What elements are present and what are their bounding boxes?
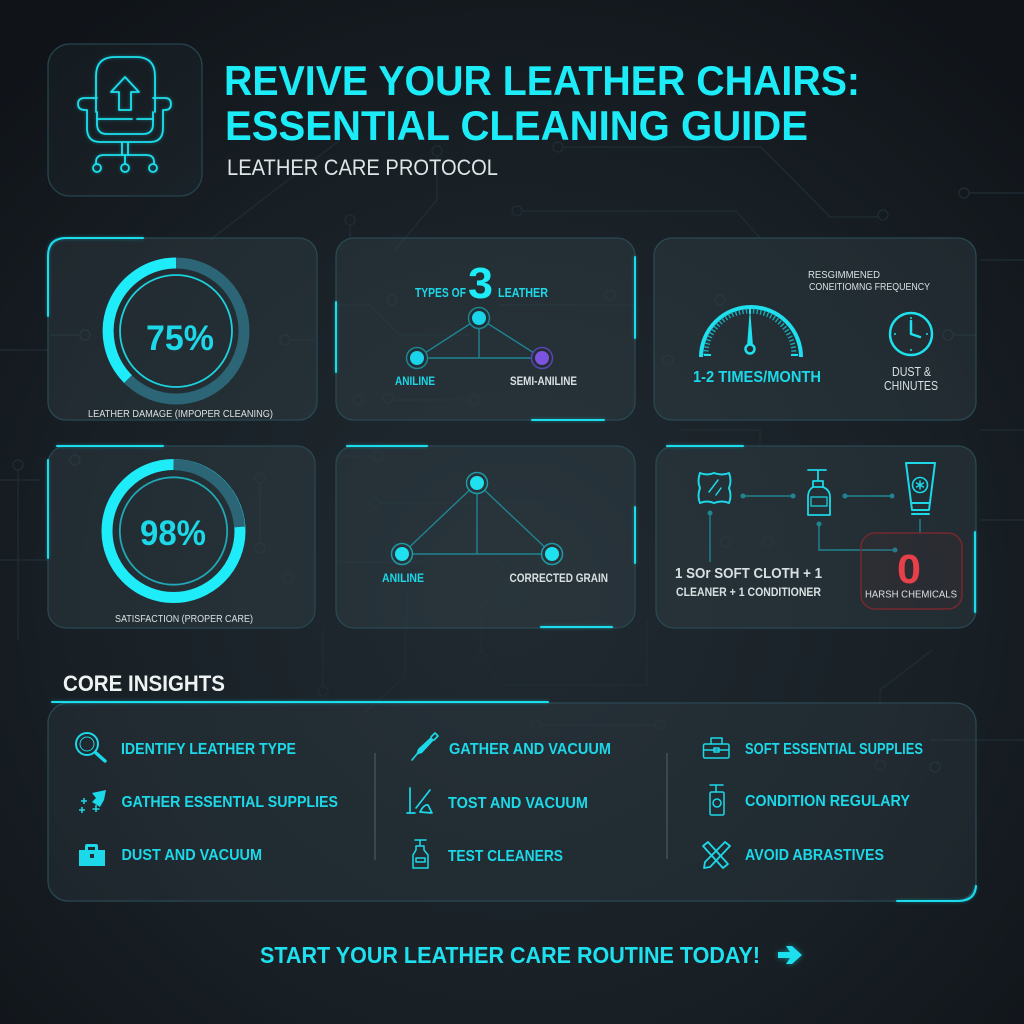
heading — [808, 270, 930, 293]
panel: types of leather — [336, 238, 635, 420]
panel: supplies — [656, 446, 976, 628]
panel: core insights — [48, 702, 976, 901]
callout: zero harsh chemicals — [861, 533, 962, 609]
insight: test cleaners: TEST CLEANERS — [448, 848, 563, 865]
insight: dust and vacuum — [79, 844, 262, 866]
heading: RESGIMMENED — [808, 270, 880, 281]
panel: conditioning frequency — [654, 238, 976, 420]
heading: types of 3 leather: LEATHER — [498, 285, 548, 300]
label: aniline: ANILINE — [395, 374, 435, 388]
panel: aniline and corrected grain — [336, 446, 635, 628]
label: corrected grain: CORRECTED GRAIN — [510, 571, 608, 585]
insight: test cleaners — [413, 840, 563, 868]
clock caption: DUST & — [892, 365, 932, 379]
supplies text: 1 SOr SOFT CLOTH + 1 — [675, 566, 822, 582]
heading: types of 3 leather: 3 — [468, 259, 493, 308]
insight: condition regulary — [710, 785, 910, 815]
insight: avoid abrasives — [703, 842, 884, 868]
insight: gather and vacuum: GATHER AND VACUUM — [449, 741, 611, 758]
icon: arrow — [778, 946, 802, 964]
header icon: office chair — [48, 44, 202, 196]
supplies text: CLEANER + 1 CONDITIONER — [676, 585, 821, 599]
supplies text — [675, 566, 822, 599]
stat label: SATISFACTION (PROPER CARE) — [115, 614, 253, 625]
icon: cloth — [698, 473, 730, 503]
insight: condition regulary: CONDITION REGULARY — [745, 793, 910, 810]
insight: tost and vacuum: TOST AND VACUUM — [448, 795, 588, 812]
panel: leather damage stat — [48, 238, 317, 420]
clock caption — [884, 365, 938, 393]
donut chart: 75% — [108, 263, 244, 399]
title: ESSENTIAL CLEANING GUIDE — [225, 102, 808, 149]
heading: core insights: CORE INSIGHTS — [63, 671, 225, 696]
heading: types of 3 leather: TYPES OF — [415, 285, 466, 300]
title: REVIVE YOUR LEATHER CHAIRS: — [224, 57, 860, 104]
stat value: 75% — [146, 319, 214, 358]
node diagram — [406, 308, 552, 368]
subtitle: LEATHER CARE PROTOCOL — [227, 155, 498, 180]
icon: clock — [890, 313, 932, 355]
insight: tost and vacuum — [407, 788, 588, 813]
insight: identify leather type — [76, 733, 296, 761]
gauge — [701, 307, 801, 357]
panel: satisfaction stat — [48, 446, 315, 628]
insight: avoid abrasives: AVOID ABRASTIVES — [745, 847, 884, 864]
call to action: START YOUR LEATHER CARE ROUTINE TODAY! — [260, 942, 760, 968]
icon: cleaner bottle — [808, 470, 830, 515]
stat label: LEATHER DAMAGE (IMPOPER CLEANING) — [88, 409, 273, 420]
insight: soft essential supplies — [704, 738, 923, 758]
connectors — [708, 494, 920, 562]
insight: soft essential supplies: SOFT ESSENTIAL SUPPLIES — [745, 741, 923, 758]
insight: dust and vacuum: DUST AND VACUUM — [122, 847, 262, 864]
insight: gather essential supplies — [79, 790, 338, 813]
clock caption: CHINUTES — [884, 379, 938, 393]
callout: zero harsh chemicals: HARSH CHEMICALS — [865, 588, 957, 600]
insight: gather essential supplies: GATHER ESSENTIAL SUPPLIES — [122, 794, 338, 811]
heading: CONEITIOMNG FREQUENCY — [809, 282, 930, 293]
icon: conditioner tube — [906, 463, 935, 514]
donut chart: 98% — [107, 464, 240, 598]
insight: identify leather type: IDENTIFY LEATHER TYPE — [121, 741, 296, 758]
stat value: 98% — [140, 514, 206, 553]
circuit pattern background — [0, 140, 1024, 772]
title — [224, 57, 860, 149]
gauge value: 1-2 TIMES/MONTH — [693, 369, 821, 386]
callout: zero harsh chemicals: 0 — [897, 546, 921, 592]
heading: types of 3 leather — [415, 259, 548, 308]
label: aniline: ANILINE — [382, 571, 424, 585]
node diagram — [392, 472, 562, 564]
insight: gather and vacuum — [412, 733, 611, 760]
label: semi-aniline: SEMI-ANILINE — [510, 374, 577, 388]
